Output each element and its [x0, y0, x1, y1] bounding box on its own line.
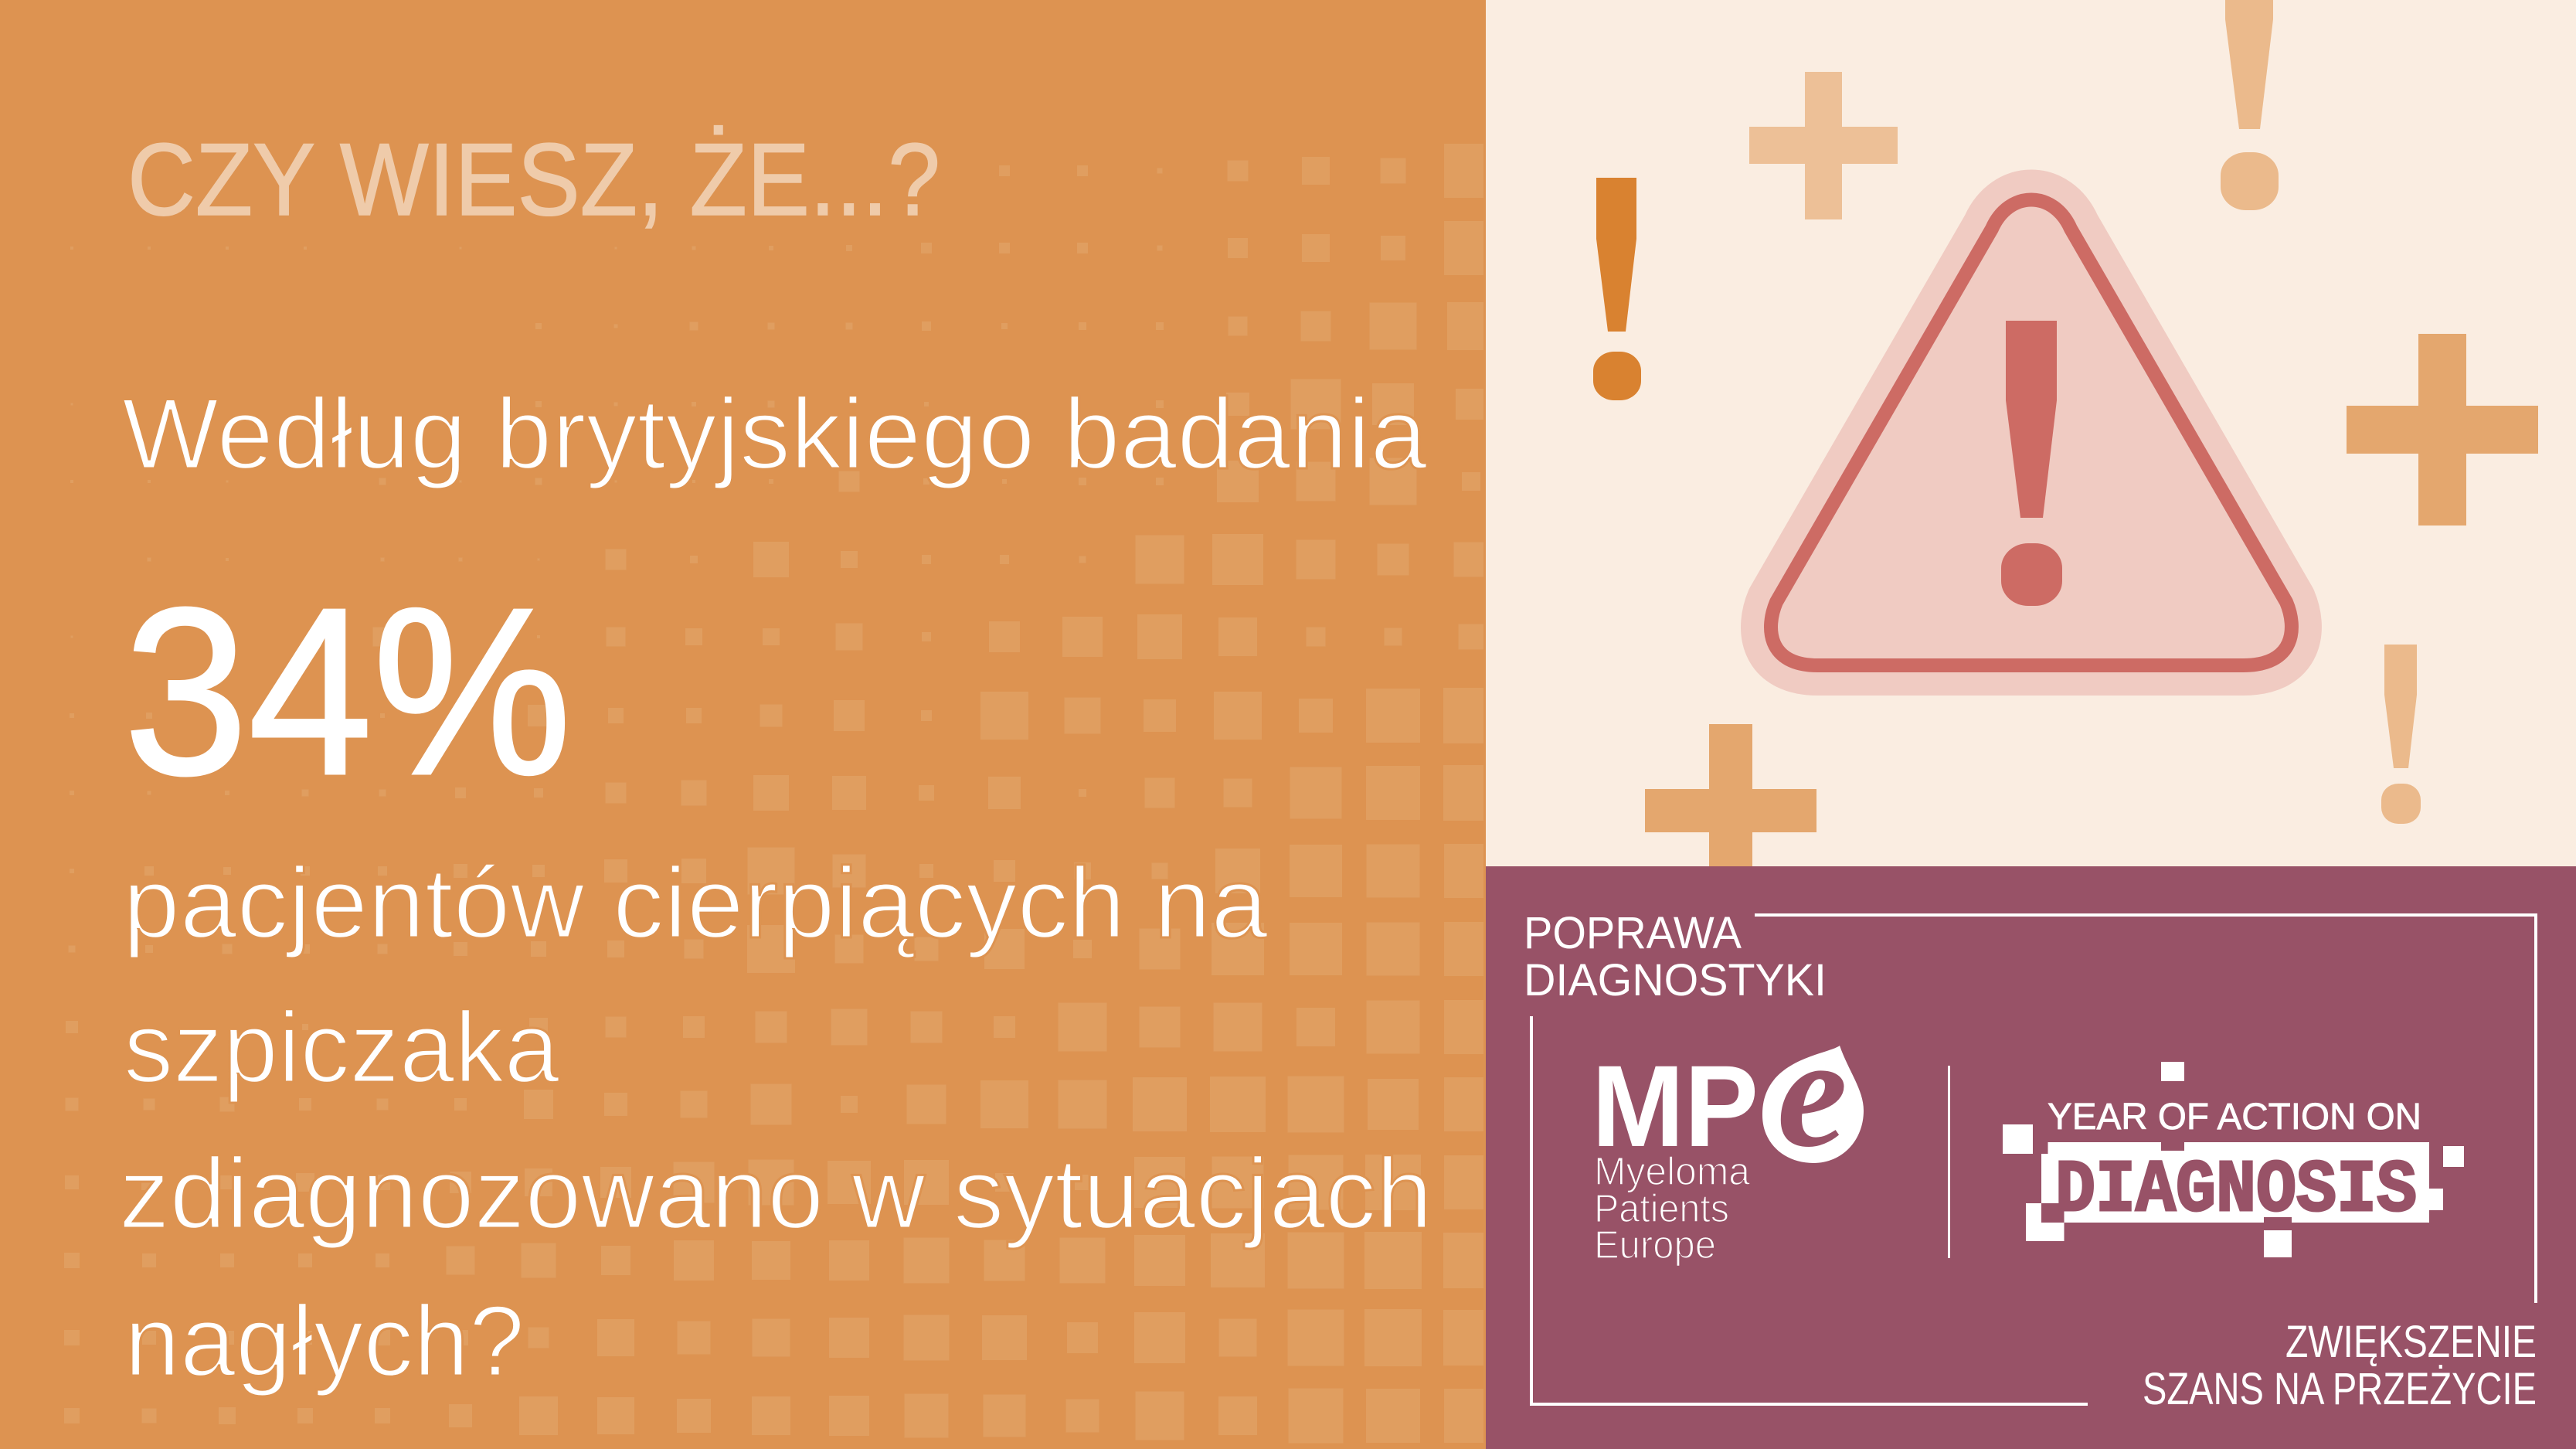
logo: Myeloma Patients Europe: Patients: [1594, 1186, 1729, 1230]
text: top label: POPRAWA: [1524, 908, 1742, 958]
panel: left orange panel: [0, 0, 1486, 1449]
text: top label: [1524, 908, 1827, 1005]
divider between logos: [1948, 1066, 1950, 1258]
logo: Myeloma Patients Europe: MP: [1592, 1041, 1759, 1171]
text: body line 4: nagłych?: [124, 1284, 525, 1397]
text: bottom label: [2143, 1317, 2537, 1414]
text: body line 3: zdiagnozowano w sytuacjach: [119, 1137, 1432, 1250]
panel: warning illustration: [1486, 0, 2576, 869]
title: CZY WIESZ, ŻE...?: [127, 123, 940, 237]
frame lines: [1531, 915, 2536, 1404]
text: intro line: Według brytyjskiego badania: [122, 377, 1428, 490]
icon: top exclamation mark: [2221, 0, 2279, 210]
logo: Year of Action on Diagnosis: YEAR OF ACTION ON: [2048, 1097, 2421, 1138]
big number: 34%: 34%: [124, 559, 572, 825]
logo: Year of Action on Diagnosis: [2003, 1062, 2464, 1257]
icon: light plus top: [1749, 72, 1898, 219]
logo: Year of Action on Diagnosis: DIAGNOSIS: [2055, 1148, 2417, 1233]
logo: Myeloma Patients Europe: [1592, 1005, 1864, 1267]
text: body line 2: szpiczaka: [124, 991, 560, 1104]
logo: Myeloma Patients Europe: Europe: [1594, 1223, 1716, 1267]
icon: orange exclamation mark: [1593, 178, 1641, 400]
logo: Myeloma Patients Europe: Myeloma: [1594, 1149, 1751, 1193]
icon: plus bottom: [1645, 724, 1816, 869]
icon: warning triangle: [1771, 199, 2292, 665]
icon: plus right: [2347, 334, 2538, 526]
text: body line 1: pacjentów cierpiących na: [123, 846, 1269, 959]
logo: Myeloma Patients Europe: e: [1777, 1005, 1847, 1180]
icon: bottom right exclamation mark: [2381, 645, 2421, 824]
text: top label: DIAGNOSTYKI: [1524, 955, 1827, 1005]
panel: plum footer: [1486, 866, 2576, 1449]
dot pattern background: [72, 171, 1471, 1416]
